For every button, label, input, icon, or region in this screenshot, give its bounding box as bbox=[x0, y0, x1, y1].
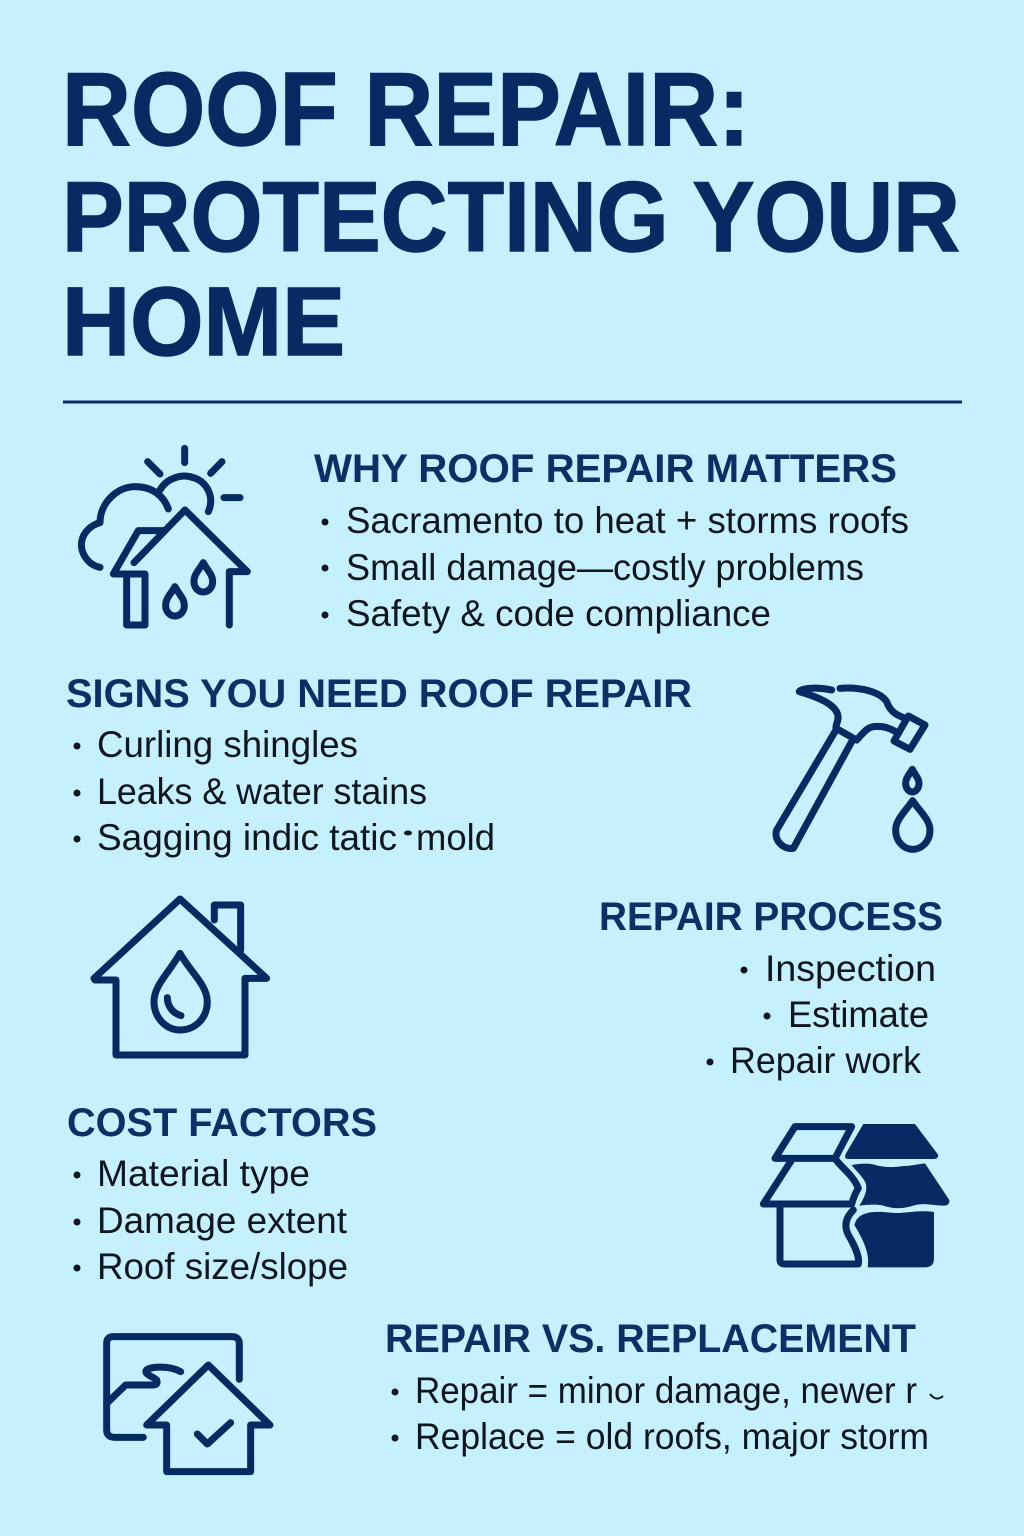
panel: cost factors: COST FACTORS bbox=[67, 1101, 377, 1145]
panel: signs you need roof repair bbox=[66, 672, 692, 858]
panel: repair vs replacement: Replace = old roofs, major storm bbox=[415, 1416, 929, 1457]
panel: signs you need roof repair: Leaks & water stains bbox=[97, 771, 427, 812]
panel: repair vs replacement bbox=[385, 1317, 943, 1457]
panel: why roof repair matters: WHY ROOF REPAIR MATTERS bbox=[314, 447, 897, 491]
panel: repair process bbox=[599, 895, 943, 1081]
icon: frame and house with check bbox=[107, 1337, 270, 1472]
panel: cost factors bbox=[67, 1101, 377, 1287]
panel: repair process: Inspection bbox=[765, 948, 936, 989]
panel: cost factors: Roof size/slope bbox=[97, 1246, 348, 1287]
panel: repair process: REPAIR PROCESS bbox=[599, 895, 943, 939]
panel: why roof repair matters: Sacramento to heat + storms roofs bbox=[346, 500, 909, 541]
title bbox=[62, 52, 960, 376]
panel: signs you need roof repair: mold bbox=[416, 817, 495, 858]
panel: repair process: Estimate bbox=[788, 994, 929, 1035]
icon: hammer and drops bbox=[776, 688, 930, 849]
panel: cost factors: Material type bbox=[97, 1153, 310, 1194]
icon: storm and house bbox=[81, 448, 247, 625]
icon: house with water drop bbox=[94, 899, 267, 1055]
title: PROTECTING YOUR bbox=[62, 161, 960, 272]
icon: split house bbox=[763, 1124, 949, 1267]
panel: cost factors: Damage extent bbox=[97, 1200, 348, 1241]
panel: repair process: Repair work bbox=[730, 1040, 921, 1081]
title: ROOF REPAIR: bbox=[62, 52, 750, 168]
panel: why roof repair matters: Small damage—costly problems bbox=[346, 547, 864, 588]
title: HOME bbox=[62, 267, 345, 376]
panel: repair vs replacement: Repair = minor damage, newer r bbox=[415, 1370, 917, 1411]
panel: repair vs replacement: REPAIR VS. REPLACEMENT bbox=[385, 1317, 916, 1361]
panel: signs you need roof repair: Curling shingles bbox=[97, 724, 358, 765]
panel: why roof repair matters bbox=[314, 447, 909, 634]
panel: signs you need roof repair: Sagging indic tatic bbox=[97, 817, 397, 858]
panel: signs you need roof repair: SIGNS YOU NEED ROOF REPAIR bbox=[66, 672, 692, 716]
panel: why roof repair matters: Safety & code compliance bbox=[346, 593, 771, 634]
